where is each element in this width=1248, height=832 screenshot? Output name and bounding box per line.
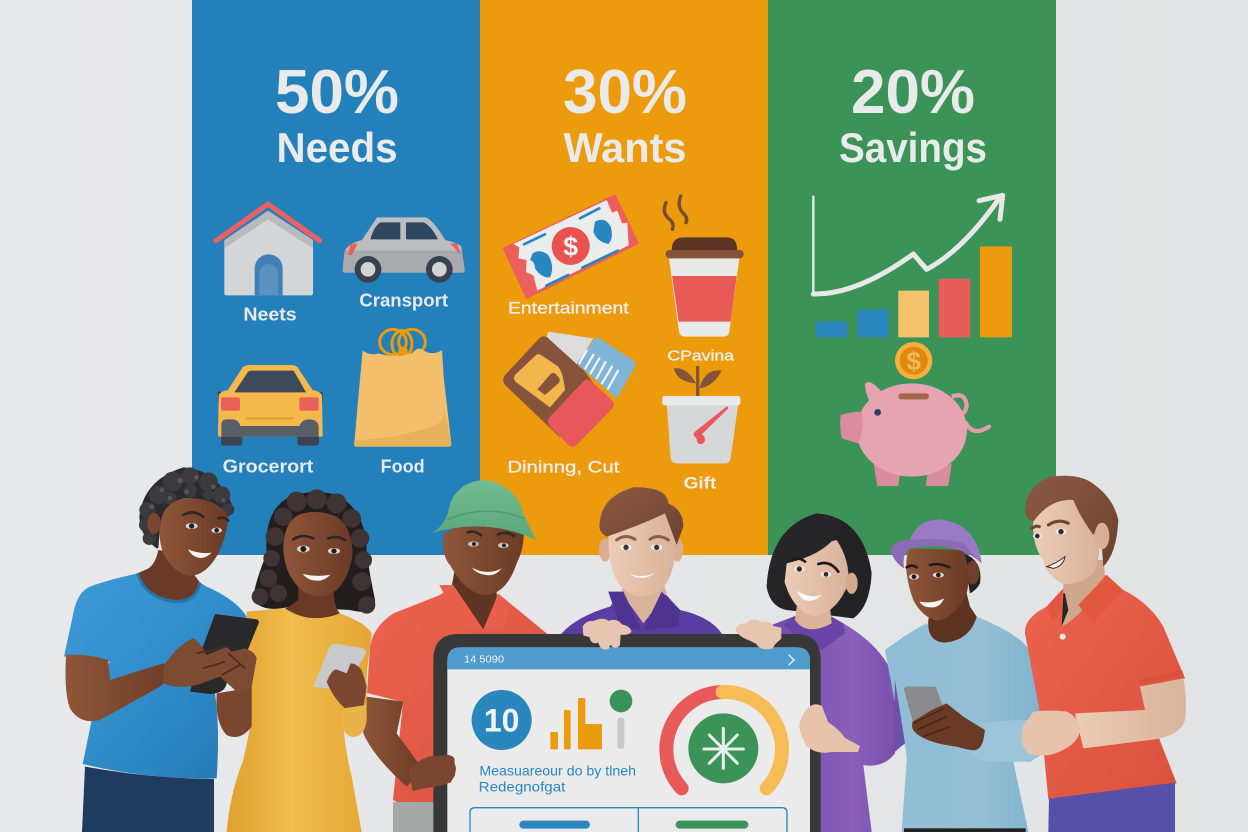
label: neets: Neets [243,303,297,324]
chart: growth line and bars [813,195,1012,337]
heading: needs: Needs [276,124,398,171]
person: red polo man with green cap [363,480,547,832]
person: light-skin man in purple polo [562,487,722,657]
hand: left top [583,619,631,649]
hair: curly [139,467,234,548]
heading: 30%: 30% [563,58,687,127]
label: cpavina: CPavina [667,349,735,365]
icon: wallet [503,332,635,447]
icon: shopping bag [354,329,451,447]
hands holding tablet [410,619,781,790]
badge: 10 [472,690,532,750]
icon: coin [895,342,932,379]
heading: 20%: 20% [851,58,975,127]
icon: plant pot [662,366,740,463]
gauge [666,685,782,788]
heading: wants: Wants [564,124,686,171]
label: gift: Gift [684,474,717,493]
heading: 50%: 50% [275,58,399,127]
hand: left dark [410,756,455,790]
icon: gray car [343,217,465,283]
icon: ticket [503,195,638,298]
panel: savings [768,0,1056,555]
label: cransport: Cransport [359,289,448,310]
tablet dashboard [433,634,821,832]
panel: wants [480,0,768,555]
icon group: savings [813,195,1012,486]
label: food: Food [381,456,425,477]
tablet frame [433,634,821,832]
icon: coin: $ [906,346,921,376]
person: woman in yellow dress [227,489,375,832]
text block: Measuareour do by tlneh [479,762,636,778]
mini bar chart [550,690,632,749]
label: entertainment: Entertainment [508,298,629,317]
icon: yellow car [218,365,323,446]
badge: 10: 10 [484,702,519,738]
person: woman in purple sweater [750,513,895,832]
icon: coffee cup [664,196,744,337]
label: dining out: Dininng, Cut [507,458,620,477]
header bar: 14 5090 [464,655,504,666]
icon: ticket: $ [563,231,578,261]
text block: Redegnofgat [479,778,565,794]
heading: savings: Savings [839,124,987,171]
text block [479,762,636,794]
person: man in blue t-shirt with phone [64,467,259,832]
icon group: wants [503,195,744,493]
person: man in red polo, right [1021,476,1186,832]
header bar [447,647,810,669]
bottom buttons [470,808,787,832]
icon: house [216,204,320,295]
hand: right lower light [799,704,860,753]
icon: piggy bank [840,382,989,486]
panel: needs [192,0,480,555]
tablet screen [447,647,810,832]
label: grocerort: Grocerort [223,456,313,477]
icon group: needs [216,204,465,477]
hand: right top [736,620,781,649]
person: man in light blue sweater with purple cap [885,519,1043,832]
